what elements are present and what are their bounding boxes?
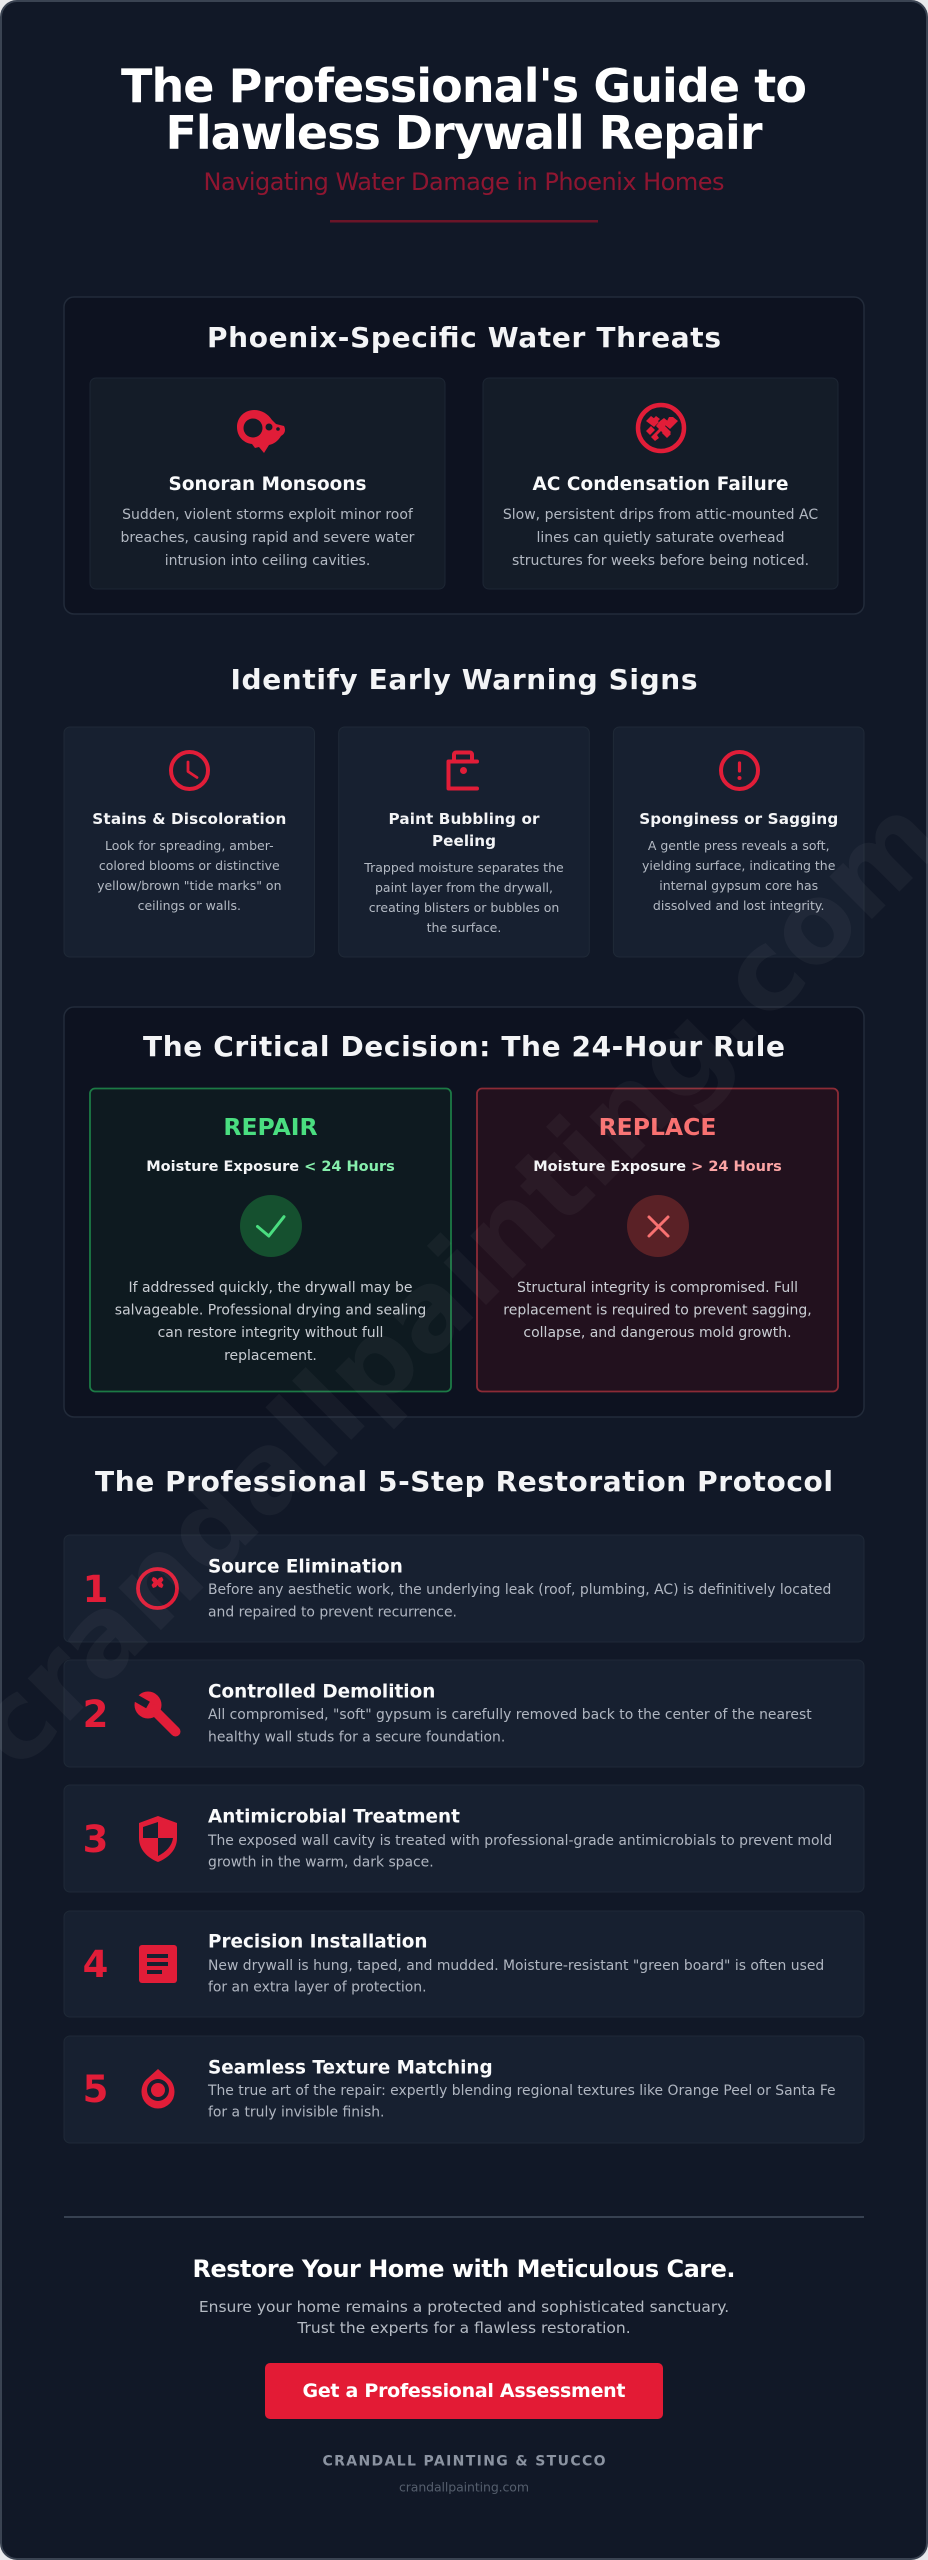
call to action heading: Restore Your Home with Meticulous Care. — [192, 2255, 736, 2283]
text: repair description: salvageable. Professional drying and sealing — [115, 1302, 426, 1318]
title: Flawless Drywall Repair — [166, 106, 763, 160]
text: AC description: lines can quietly saturate overhead — [536, 530, 785, 546]
heading: paint bubbling: Paint Bubbling or — [388, 810, 540, 828]
text: step 2 description: All compromised, "soft" gypsum is carefully removed back to the center of the nearest — [208, 1707, 812, 1723]
button — [265, 2363, 663, 2419]
text: step 4 description — [208, 1958, 824, 1996]
card: stains and discoloration — [64, 727, 314, 957]
card: replace: REPLACE — [599, 1113, 716, 1141]
card: sponginess or sagging: Sponginess or Sagging — [639, 810, 838, 828]
text: paint description — [363, 860, 564, 935]
step 3: 3 — [83, 1818, 108, 1861]
card: Sonoran Monsoons: Sonoran Monsoons — [168, 474, 367, 495]
icon: wrench — [134, 1692, 176, 1732]
text: paint description: creating blisters or bubbles on — [369, 900, 559, 915]
panel: the 24-hour rule — [64, 1007, 864, 1417]
icon: AC condensation — [638, 405, 684, 451]
heading: paint bubbling: Peeling — [432, 832, 496, 850]
text: step 1 description: Before any aesthetic work, the underlying leak (roof, plumbing, AC) is definitively located — [208, 1582, 831, 1598]
text: step 2 description: healthy wall studs for a secure foundation. — [208, 1730, 505, 1746]
step 2: Controlled Demolition — [208, 1682, 435, 1702]
text: replace description: replacement is required to prevent sagging, — [503, 1302, 812, 1318]
text: replace description — [503, 1280, 812, 1341]
icon: document — [139, 1945, 177, 1983]
step 3 — [64, 1785, 864, 1892]
brand name: CRANDALL PAINTING & STUCCO — [322, 2454, 606, 2470]
text: step 4 description: New drywall is hung, taped, and mudded. Moisture-resistant "green board" is often used — [208, 1958, 824, 1974]
card: replace — [477, 1088, 838, 1392]
text: step 5 description — [207, 2083, 836, 2120]
text: paint description: the surface. — [427, 920, 501, 935]
heading: restoration protocol: The Professional 5-Step Restoration Protocol — [95, 1465, 833, 1498]
text: step 1 description: and repaired to prevent recurrence. — [208, 1604, 457, 1620]
text: step 3 description: The exposed wall cavity is treated with professional-grade antimicrobials to prevent mold — [207, 1833, 832, 1849]
call to action text — [199, 2298, 729, 2337]
text: AC description — [503, 507, 818, 569]
card: stains and discoloration: Stains & Discoloration — [92, 810, 286, 828]
text: monsoon description: intrusion into ceiling cavities. — [165, 553, 370, 569]
text: stains description — [97, 838, 282, 913]
text: stains description: yellow/brown "tide marks" on — [97, 878, 282, 893]
icon: alert — [721, 752, 758, 789]
text: AC description: structures for weeks before being noticed. — [512, 553, 809, 569]
text: stains description: Look for spreading, amber- — [105, 838, 274, 853]
heading: 24-hour rule: The Critical Decision: The 24-Hour Rule — [143, 1030, 785, 1063]
website: crandallpainting.com — [399, 2480, 529, 2494]
step 4: Precision Installation — [208, 1932, 428, 1952]
icon: paint can — [448, 752, 477, 788]
icon: monsoon — [237, 410, 285, 453]
icon: clock — [171, 752, 208, 789]
heading: paint bubbling — [388, 810, 540, 850]
text: repair description: can restore integrity without full — [158, 1325, 383, 1341]
text: step 3 description — [207, 1833, 832, 1870]
card: AC condensation failure — [483, 378, 838, 589]
text: sponginess description — [642, 838, 836, 913]
text: repair description — [115, 1280, 426, 1364]
heading: early warning signs: Identify Early Warning Signs — [230, 663, 698, 696]
card: AC condensation failure: AC Condensation Failure — [532, 474, 788, 495]
text: stains description: colored blooms or distinctive — [99, 858, 280, 873]
text: step 5 description: for a truly invisible finish. — [208, 2104, 384, 2120]
text: step 4 description: for an extra layer of protection. — [208, 1980, 427, 1996]
title — [121, 59, 807, 160]
icon: cross — [627, 1195, 689, 1257]
text: stains description: ceilings or walls. — [138, 898, 241, 913]
text: step 1 description — [208, 1582, 831, 1620]
heading: water threats: Phoenix-Specific Water Threats — [207, 321, 721, 354]
text: step 5 description: The true art of the repair: expertly blending regional textures like Orange Peel or Santa Fe — [207, 2083, 836, 2099]
text: replace description: Structural integrity is compromised. Full — [517, 1280, 798, 1296]
text: sponginess description: internal gypsum core has — [659, 878, 818, 893]
text: step 3 description: growth in the warm, dark space. — [208, 1854, 434, 1870]
panel: Phoenix-specific water threats — [64, 297, 864, 614]
label: moisture over 24 hours: Moisture Exposure > 24 Hours — [533, 1159, 782, 1175]
text: monsoon description: Sudden, violent storms exploit minor roof — [122, 507, 414, 523]
card: paint bubbling — [339, 727, 589, 957]
text: replace description: collapse, and dangerous mold growth. — [523, 1325, 792, 1341]
step 1: 1 — [83, 1568, 108, 1611]
text: monsoon description: breaches, causing rapid and severe water — [121, 530, 415, 546]
icon: check — [240, 1195, 302, 1257]
call to action text: Ensure your home remains a protected and sophisticated sanctuary. — [199, 2298, 729, 2316]
step 4: 4 — [83, 1943, 108, 1986]
text: paint description: Trapped moisture separates the — [363, 860, 564, 875]
subtitle: Navigating Water Damage in Phoenix Homes — [204, 168, 724, 196]
step 4 — [64, 1911, 864, 2017]
step 1: Source Elimination — [208, 1556, 403, 1578]
text: repair description: replacement. — [224, 1348, 317, 1364]
step 5 — [64, 2036, 864, 2143]
icon: shield — [139, 1816, 177, 1862]
card: repair — [90, 1088, 451, 1392]
button: Get a Professional Assessment — [302, 2380, 626, 2402]
step 2 — [64, 1660, 864, 1767]
text: repair description: If addressed quickly, the drywall may be — [128, 1280, 413, 1296]
step 5: Seamless Texture Matching — [208, 2058, 493, 2078]
label: moisture under 24 hours: Moisture Exposure < 24 Hours — [146, 1159, 395, 1175]
text: sponginess description: dissolved and lost integrity. — [653, 898, 824, 913]
step 3: Antimicrobial Treatment — [208, 1806, 460, 1828]
card: repair: REPAIR — [223, 1113, 318, 1141]
step 5: 5 — [83, 2068, 108, 2111]
call to action text: Trust the experts for a flawless restoration. — [296, 2319, 631, 2337]
step 1 — [64, 1535, 864, 1642]
text: monsoon description — [121, 507, 415, 569]
icon: texture drop — [142, 2069, 174, 2108]
text: AC description: Slow, persistent drips from attic-mounted AC — [503, 507, 818, 523]
text: paint description: paint layer from the drywall, — [375, 880, 553, 895]
text: sponginess description: yielding surface, indicating the — [642, 858, 836, 873]
text: step 2 description — [208, 1707, 812, 1746]
card: sponginess or sagging — [613, 727, 864, 957]
text: sponginess description: A gentle press reveals a soft, — [648, 838, 830, 853]
step 2: 2 — [83, 1693, 108, 1736]
icon: source target — [138, 1569, 177, 1608]
card: Sonoran Monsoons — [90, 378, 445, 589]
title: The Professional's Guide to — [121, 59, 807, 113]
